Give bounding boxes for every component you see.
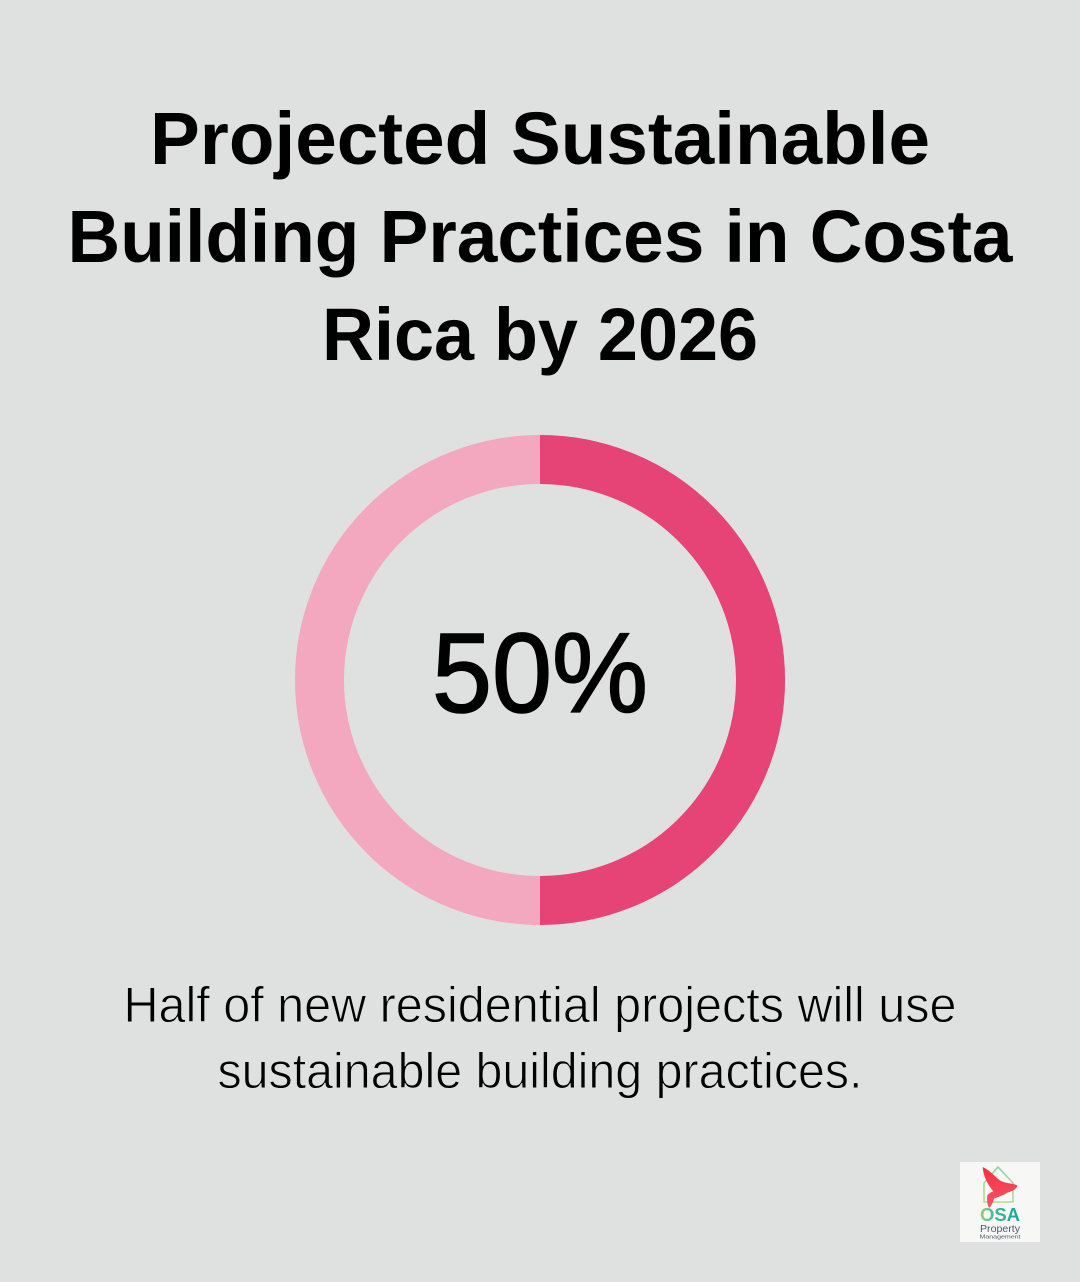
donut value: 50% xyxy=(432,610,648,736)
title: Rica by 2026 xyxy=(322,293,758,376)
logo text: OSA xyxy=(980,1205,1020,1225)
icon: red bird xyxy=(983,1167,1017,1208)
title: Projected Sustainable xyxy=(150,97,930,180)
title xyxy=(68,97,1013,376)
logo: OSA Property Management xyxy=(960,1162,1040,1242)
donut chart: 50% xyxy=(320,460,760,900)
description: Half of new residential projects will use xyxy=(124,977,956,1033)
description: sustainable building practices. xyxy=(218,1043,862,1099)
title: Building Practices in Costa xyxy=(68,195,1013,278)
logo: OSA Property Management: Management xyxy=(980,1234,1021,1240)
description xyxy=(124,977,956,1099)
logo: OSA Property Management: Property xyxy=(980,1224,1020,1235)
icon: house outline xyxy=(984,1167,1013,1202)
